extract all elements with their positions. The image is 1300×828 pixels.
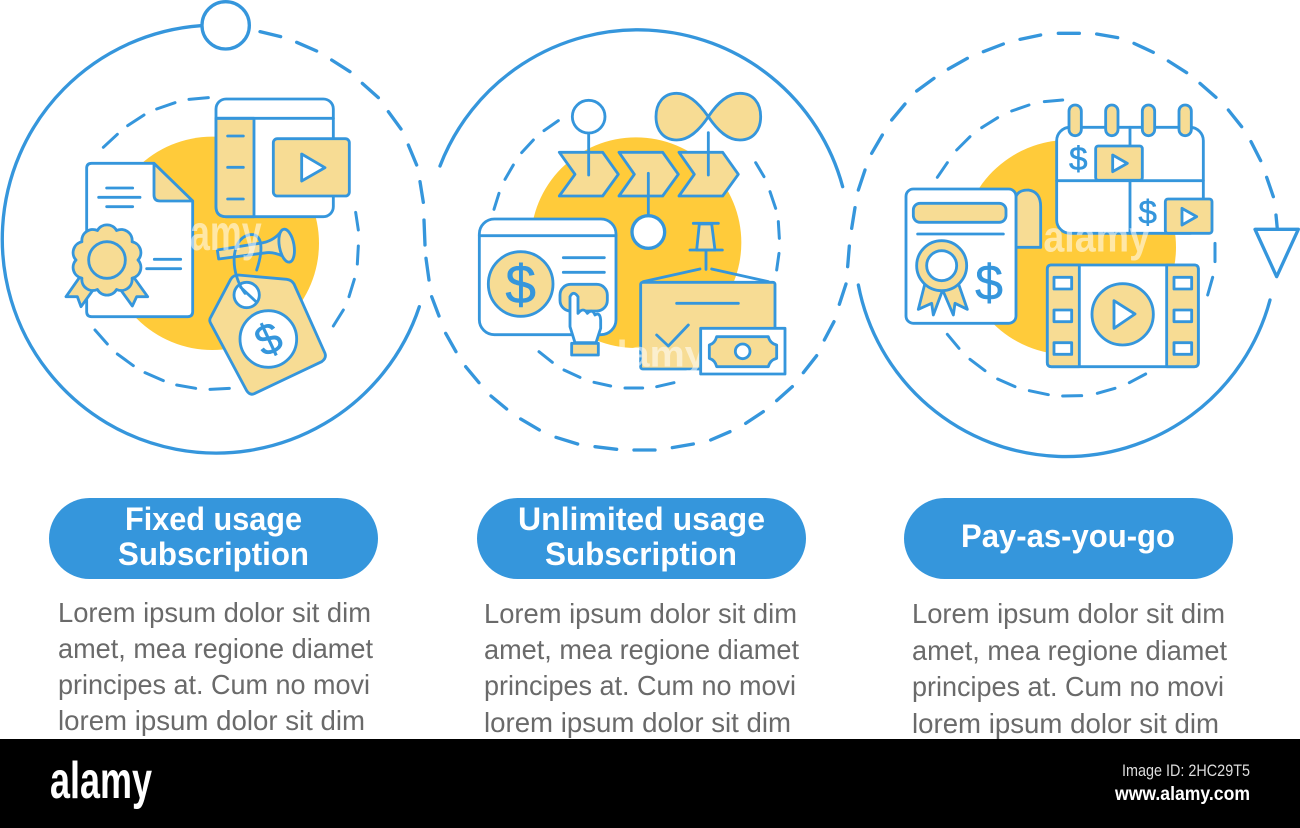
heading pill: unlimited usage subscription: Unlimited usage	[518, 501, 765, 537]
watermark: lamy	[617, 334, 707, 375]
outer ring: solid arc	[858, 285, 1270, 457]
icon: certificate document	[66, 163, 193, 317]
heading pill: pay-as-you-go	[904, 498, 1233, 579]
heading pill: unlimited usage subscription	[477, 498, 806, 579]
footer bar with logo and image id	[0, 739, 1300, 828]
text block: column 2 body: lorem ipsum dolor sit dim	[484, 707, 791, 738]
logo: alamy	[50, 752, 152, 810]
icon: pinned note	[641, 223, 775, 369]
icon: payment window with hand	[479, 219, 616, 355]
icon: scroll certificate	[906, 189, 1041, 323]
icon: banknote	[701, 328, 785, 374]
heading pill: unlimited usage subscription: Subscription	[545, 536, 737, 572]
panel: fixed usage subscription diagram	[2, 2, 429, 453]
inner dashed ring	[95, 98, 358, 389]
text block: column 3 body: Lorem ipsum dolor sit dim	[912, 598, 1225, 629]
heading pill: fixed usage subscription: Fixed usage	[125, 501, 302, 537]
watermark: alamy	[1043, 214, 1150, 262]
panel: pay-as-you-go diagram	[852, 33, 1298, 457]
icon: price tag: $	[248, 313, 290, 367]
text block: column 1 body: principes at. Cum no movi	[58, 669, 370, 700]
text block: column 1 body	[58, 597, 373, 736]
text block: column 3 body: principes at. Cum no movi	[912, 671, 1224, 702]
icon: video window	[216, 99, 349, 217]
icon: scroll certificate: $	[975, 254, 1003, 310]
outer ring: solid arc	[2, 26, 419, 453]
start marker circle	[202, 2, 249, 49]
inner dashed ring	[494, 121, 779, 388]
icon: film strip with play button	[1047, 265, 1198, 367]
icon: calendar	[1057, 105, 1212, 233]
icon: payment window with hand: $	[505, 253, 536, 315]
icon: price tag	[210, 235, 325, 394]
text block: column 2 body: Lorem ipsum dolor sit dim	[484, 598, 797, 629]
heading pill: pay-as-you-go: Pay-as-you-go	[961, 518, 1175, 554]
yellow background circle	[106, 137, 319, 350]
text block: column 2 body: amet, mea regione diamet	[484, 634, 799, 665]
inner dashed ring	[937, 100, 1215, 396]
icon: process chevrons with nodes	[559, 93, 761, 248]
text block: column 3 body	[912, 598, 1227, 739]
outer ring: dashed arc	[852, 33, 1277, 229]
text block: column 2 body	[484, 598, 799, 738]
text block: column 3 body: lorem ipsum dolor sit dim	[912, 708, 1219, 739]
watermark: amy	[190, 205, 262, 261]
text block: column 2 body: principes at. Cum no movi	[484, 670, 796, 701]
heading pill: fixed usage subscription: Subscription	[118, 536, 309, 572]
heading pill: fixed usage subscription	[49, 498, 378, 579]
outer ring: dashed arc	[432, 246, 849, 450]
image id: Image ID: 2HC29T5	[1122, 761, 1250, 780]
icon: calendar: $	[1069, 141, 1088, 178]
text block: column 3 body: amet, mea regione diamet	[912, 635, 1227, 666]
outer ring: solid arc	[440, 30, 843, 187]
text block: column 1 body: lorem ipsum dolor sit dim	[58, 705, 365, 736]
outer ring: dashed arc	[260, 32, 429, 280]
text block: column 1 body: Lorem ipsum dolor sit dim	[58, 597, 371, 628]
yellow background circle	[531, 137, 741, 348]
icon: calendar: $	[1138, 194, 1157, 231]
icon: horn	[217, 228, 297, 263]
yellow background circle	[961, 140, 1176, 355]
website: www.alamy.com	[1114, 784, 1250, 805]
panel: unlimited usage subscription diagram	[432, 30, 849, 450]
arrowhead	[1255, 229, 1298, 277]
text block: column 1 body: amet, mea regione diamet	[58, 633, 373, 664]
